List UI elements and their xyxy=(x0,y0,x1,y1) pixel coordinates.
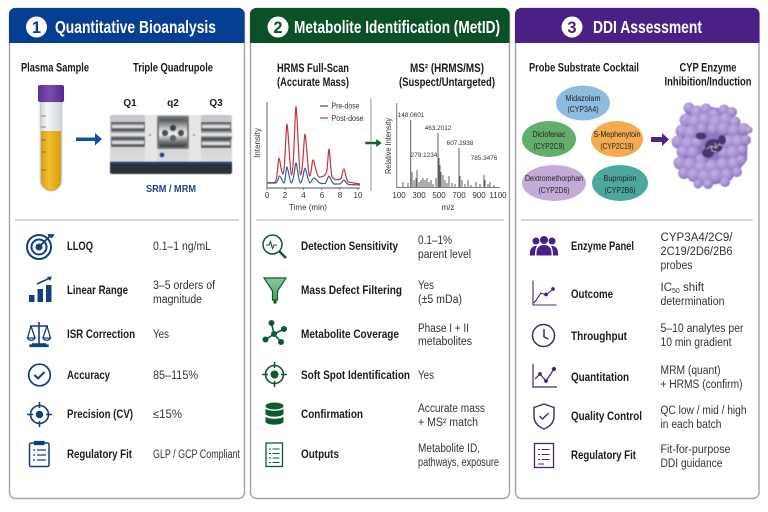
icon: clipboard xyxy=(30,442,49,466)
row: Quality Control: Quality Control xyxy=(571,411,642,423)
probe: Midazolam: Midazolam xyxy=(566,93,600,103)
probe: Bupropion: (CYP2B6) xyxy=(604,185,636,195)
probe: Dextromethorphan: (CYP2D6) xyxy=(538,185,570,195)
chart: MS2 spectrum xyxy=(384,103,507,212)
heading: CYP enzyme: Inhibition/Induction xyxy=(664,76,752,88)
row: Linear Range: Linear Range xyxy=(67,285,128,297)
row: Soft Spot Identification: Soft Spot Identification xyxy=(301,370,410,382)
row: Linear Range: 3–5 orders of xyxy=(153,280,216,292)
label: SRM / MRM: SRM / MRM xyxy=(146,183,196,195)
chart: MS2 spectrum: 500 xyxy=(432,191,446,200)
row: Regulatory Fit: Regulatory Fit xyxy=(67,449,132,461)
heading: MS2: MS² (HRMS/MS) xyxy=(410,63,484,75)
row: Precision (CV): Precision (CV) xyxy=(67,409,133,421)
row: Regulatory Fit: Regulatory Fit xyxy=(571,450,636,462)
row: Confirmation xyxy=(266,402,485,429)
row: Mass Defect Filtering: (±5 mDa) xyxy=(418,294,462,306)
chart: MS2 spectrum: 700 xyxy=(452,191,466,200)
chart: chromatogram xyxy=(253,102,364,212)
probe: Diclofenac: Diclofenac xyxy=(532,129,566,139)
row: Metabolite Coverage: Metabolite Coverage xyxy=(301,329,399,341)
chart: MS2 spectrum: 148.0601 xyxy=(398,112,425,119)
row: Regulatory Fit xyxy=(30,442,241,466)
icon: database xyxy=(266,402,284,425)
probe: Bupropion xyxy=(592,165,648,201)
row: Outcome xyxy=(533,280,724,308)
chart: MS2 spectrum: 300 xyxy=(412,191,426,200)
probe: Dextromethorphan: Dextromethorphan xyxy=(525,173,583,183)
row: Linear Range: magnitude xyxy=(153,294,202,306)
row: Outputs: Outputs xyxy=(301,449,339,461)
heading: probe substrate cocktail: Probe Substrate Cocktail xyxy=(529,62,639,74)
row: Confirmation: Confirmation xyxy=(301,409,363,421)
icon: growth bars xyxy=(29,276,52,302)
icon: crosshair xyxy=(27,402,52,427)
row: ISR Correction: Yes xyxy=(153,329,169,341)
row: Metabolite Coverage: Phase I + II xyxy=(418,323,469,335)
probe: Midazolam: (CYP3A4) xyxy=(568,104,599,114)
row: ISR Correction: ISR Correction xyxy=(67,329,135,341)
row: Outcome: determination xyxy=(660,296,724,308)
probe: Bupropion: Bupropion xyxy=(604,173,637,183)
heading: CYP enzyme: CYP Enzyme xyxy=(680,62,736,74)
panel: Metabolite Identification xyxy=(250,8,510,498)
row: Outputs xyxy=(266,443,499,469)
row: Enzyme Panel: probes xyxy=(660,260,693,272)
row: Confirmation: + MS² match xyxy=(418,417,478,429)
panel 3 header: DDI Assessment xyxy=(593,17,702,37)
arrow: tube to instrument xyxy=(76,133,102,146)
chart: MS2 spectrum: 100 xyxy=(392,191,406,200)
chart legend: Pre-dose xyxy=(332,102,360,110)
row: Regulatory Fit: Fit-for-purpose xyxy=(660,444,730,456)
heading: MS2: (Suspect/Untargeted) xyxy=(399,77,495,89)
row: Throughput: Throughput xyxy=(571,331,627,343)
chart: chromatogram: 8 xyxy=(338,191,343,200)
row: Metabolite Coverage: metabolites xyxy=(418,336,472,348)
arrow: scan to MS2 xyxy=(365,138,382,148)
chart: chromatogram: Time (min) xyxy=(289,203,327,212)
row: LLOQ: LLOQ xyxy=(67,241,93,253)
probe: Diclofenac xyxy=(522,121,576,157)
chart: chromatogram: 0 xyxy=(265,191,270,200)
row: Quality Control: QC low / mid / high xyxy=(660,405,746,417)
row: Enzyme Panel xyxy=(530,232,733,272)
labels: Q1 q2 Q3: q2 xyxy=(167,98,179,109)
row: Enzyme Panel: Enzyme Panel xyxy=(571,241,634,253)
chart: chromatogram: 4 xyxy=(301,191,306,200)
row: Outcome: Outcome xyxy=(571,289,613,301)
chart: MS2 spectrum: 607.2938 xyxy=(447,140,474,147)
row: Mass Defect Filtering: Mass Defect Filtering xyxy=(301,285,402,297)
row: Mass Defect Filtering xyxy=(264,278,462,306)
chart: MS2 spectrum: 463.2012 xyxy=(425,125,452,132)
icon: shield check xyxy=(534,404,554,429)
panel 2 header xyxy=(250,8,510,43)
row: Soft Spot Identification xyxy=(262,362,434,387)
probe: S-Mephenytoin xyxy=(591,121,643,157)
row: Metabolite Coverage xyxy=(263,320,472,348)
row: Quantitation: + HRMS (confirm) xyxy=(660,379,743,391)
heading: HRMS full scan xyxy=(277,63,349,89)
row: Enzyme Panel: CYP3A4/2C9/ xyxy=(660,232,733,244)
row: Quality Control: in each batch xyxy=(660,419,722,431)
row: Mass Defect Filtering: Yes xyxy=(418,280,434,292)
panel 1 header xyxy=(9,8,244,43)
icon: molecule network xyxy=(263,320,286,344)
row: Outcome: 50 xyxy=(672,288,680,295)
row: Soft Spot Identification: Yes xyxy=(418,370,434,382)
row: Outputs: Metabolite ID, xyxy=(418,443,480,455)
chart: chromatogram: 2 xyxy=(283,191,288,200)
row: Regulatory Fit xyxy=(534,444,730,470)
chart: MS2 spectrum: 900 xyxy=(472,191,486,200)
panel 2 header: 2 xyxy=(273,19,283,37)
row: Outcome: shift xyxy=(680,282,705,294)
panel: Quantitative Bioanalysis xyxy=(9,8,244,498)
chart: chromatogram: Intensity xyxy=(253,128,262,158)
row: Detection Sensitivity xyxy=(263,235,471,261)
row: LLOQ: 0.1–1 ng/mL xyxy=(153,241,212,253)
row: Throughput: 5–10 analytes per xyxy=(660,323,744,335)
triple quadrupole instrument xyxy=(110,115,232,174)
probe: Dextromethorphan xyxy=(522,165,586,201)
chart: MS2 spectrum: 279.1234 xyxy=(411,152,438,159)
icon: clock xyxy=(532,324,554,346)
row: Detection Sensitivity: 0.1–1% xyxy=(418,235,452,247)
row: Regulatory Fit: DDI guidance xyxy=(660,458,722,470)
row: Enzyme Panel: 2C19/2D6/2B6 xyxy=(660,246,732,258)
probe: Midazolam xyxy=(556,86,610,120)
row: Precision (CV) xyxy=(27,402,182,427)
heading: triple quadrupole: Triple Quadrupole xyxy=(133,62,213,74)
row: Quantitation: MRM (quant) xyxy=(660,365,721,377)
row: Quantitation: Quantitation xyxy=(571,372,629,384)
panel: DDI Assessment xyxy=(515,8,760,498)
chart: MS2 spectrum: 785.3476 xyxy=(471,155,498,162)
panel 3 header: 3 xyxy=(567,19,577,37)
panel 3 header xyxy=(515,8,760,43)
row: Precision (CV): ≤15% xyxy=(153,409,182,421)
icon: target crosshair xyxy=(262,362,287,387)
panel 1 header: Quantitative Bioanalysis xyxy=(55,17,216,37)
labels: Q1 q2 Q3: Q3 xyxy=(209,98,223,109)
icon: balance scale xyxy=(28,322,50,346)
row: Quality Control xyxy=(534,404,746,431)
chart: chromatogram: 6 xyxy=(320,191,325,200)
row: Regulatory Fit: GLP / GCP Compliant xyxy=(153,449,241,461)
labels: Q1 q2 Q3: Q1 xyxy=(123,98,137,109)
probe: Diclofenac: (CYP2C9) xyxy=(534,141,565,151)
row: Throughput: 10 min gradient xyxy=(660,337,732,349)
row: Detection Sensitivity: parent level xyxy=(418,249,471,261)
heading: plasma sample: Plasma Sample xyxy=(21,62,89,74)
row: Linear Range xyxy=(29,276,216,306)
row: Throughput xyxy=(532,323,744,349)
row: Outcome: IC xyxy=(660,282,672,294)
row: Quantitation xyxy=(533,364,743,391)
row: Confirmation: Accurate mass xyxy=(418,403,485,415)
icon: line chart xyxy=(533,280,556,305)
panel 1 header: 1 xyxy=(32,19,41,37)
icon: people group xyxy=(530,236,558,256)
icon: plasma sample tube xyxy=(38,85,64,191)
chart legend xyxy=(320,102,364,123)
arrow: probes to enzyme xyxy=(651,133,669,146)
panel 2 header: Metabolite Identification (MetID) xyxy=(294,17,500,37)
probe: S-Mephenytoin: (CYP2C19) xyxy=(600,141,634,151)
chart legend: Post-dose xyxy=(332,114,364,123)
heading: HRMS full scan: (Accurate Mass) xyxy=(277,77,349,89)
row: Accuracy xyxy=(29,364,198,386)
row: Accuracy: 85–115% xyxy=(153,370,198,382)
labels: Q1 q2 Q3 xyxy=(123,98,223,109)
heading: MS2 xyxy=(399,63,495,89)
chart: MS2 spectrum: m/z xyxy=(442,203,454,212)
row: ISR Correction xyxy=(28,322,169,346)
probe: S-Mephenytoin: S-Mephenytoin xyxy=(594,129,641,139)
icon: document checklist xyxy=(534,444,554,468)
row: Accuracy: Accuracy xyxy=(67,370,110,382)
illustration: CYP enzyme surface xyxy=(672,102,752,189)
chart: chromatogram: 10 xyxy=(354,191,363,200)
icon: trend chart xyxy=(533,364,557,387)
icon: funnel xyxy=(264,278,286,304)
chart: MS2 spectrum: Relative Intensity xyxy=(384,118,393,174)
icon: list document xyxy=(266,443,282,466)
icon: target xyxy=(27,235,53,259)
row: Detection Sensitivity: Detection Sensitivity xyxy=(301,241,399,253)
icon: check circle xyxy=(29,364,50,386)
row: LLOQ xyxy=(27,235,212,259)
heading: HRMS full scan: HRMS Full-Scan xyxy=(277,63,349,75)
chart: MS2 spectrum: 1100 xyxy=(489,191,507,200)
icon: magnifier with signal xyxy=(263,235,286,258)
row: Outputs: pathways, exposure xyxy=(418,457,499,469)
heading: CYP enzyme xyxy=(664,62,752,88)
